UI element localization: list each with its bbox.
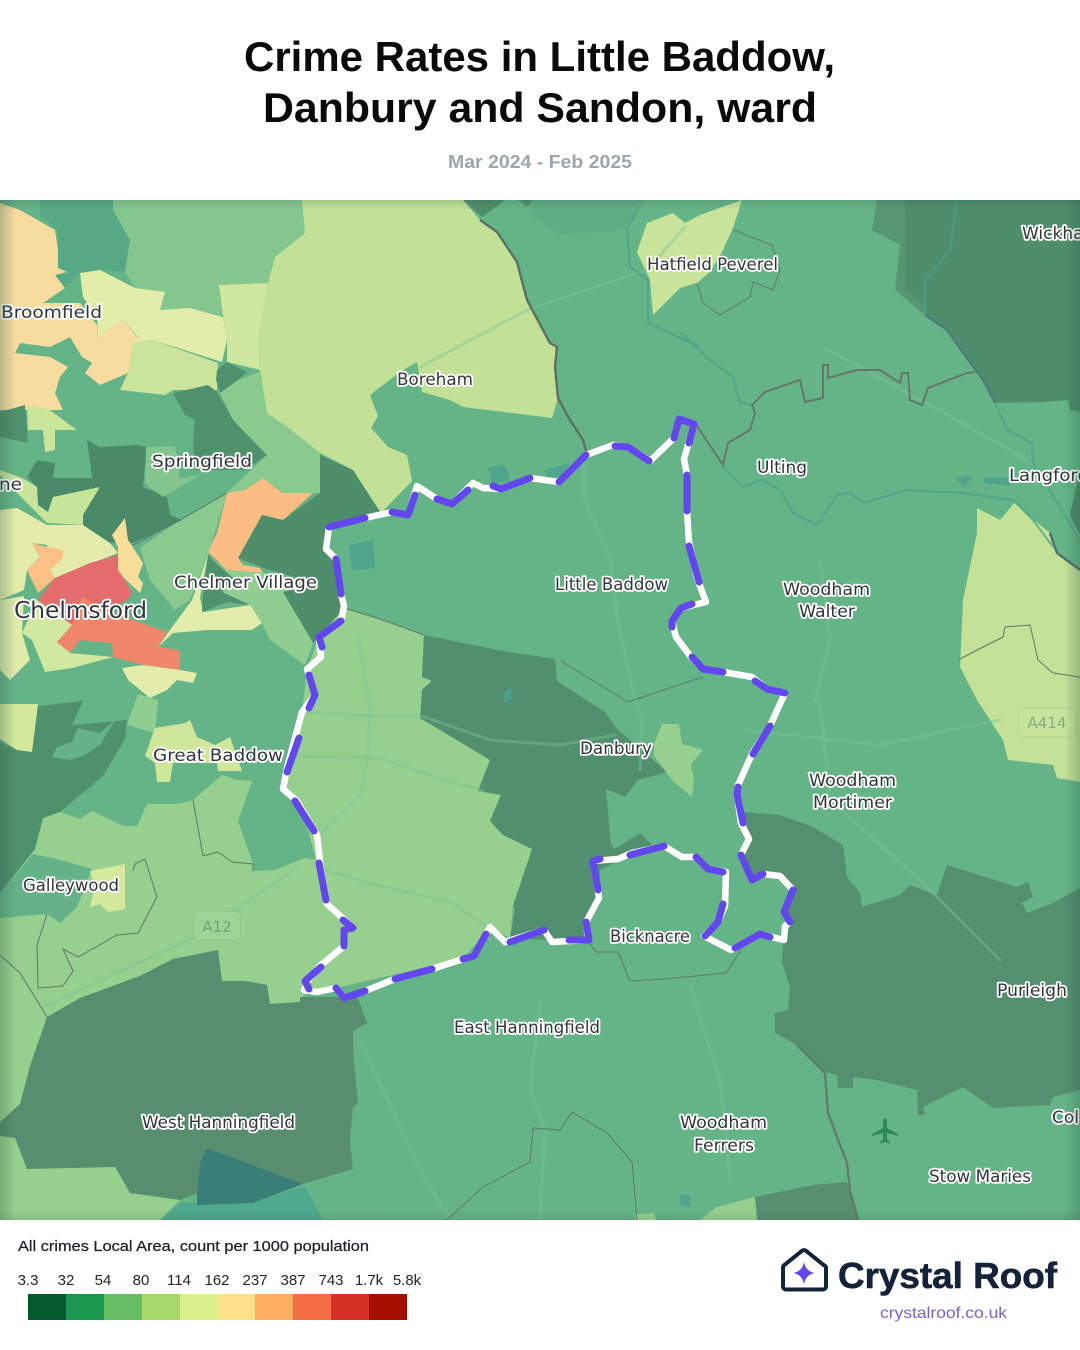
road badge: A12: A12	[202, 918, 232, 936]
place name labels: Woodham	[783, 580, 870, 600]
legend scale values: 54	[95, 1272, 111, 1289]
choropleth: light green central and western area	[0, 608, 532, 1220]
legend title: All crimes Local Area, count per 1000 population	[18, 1238, 369, 1255]
choropleth: south-east dark area	[742, 812, 1080, 1115]
rivers and water	[349, 200, 1080, 1207]
place name labels: Stow Maries	[929, 1167, 1031, 1187]
choropleth: Chelmsford north areas	[0, 203, 320, 610]
legend scale values: 114	[167, 1272, 191, 1289]
subtitle: date range: Mar 2024 - Feb 2025	[448, 152, 632, 172]
boundary lines	[0, 220, 1080, 1220]
legend scale values: 5.8k	[393, 1272, 422, 1289]
title: Crime Rates in Little Baddow,	[244, 33, 835, 80]
place name labels: Mortimer	[813, 793, 892, 813]
place name labels: Danbury	[580, 739, 652, 759]
place name labels: Bicknacre	[610, 927, 690, 947]
place name labels: Great Baddow	[153, 746, 283, 766]
road badge: A12	[194, 912, 240, 940]
place name labels: Woodham	[809, 771, 896, 791]
roads	[43, 227, 1027, 1220]
title	[244, 33, 835, 131]
legend scale values: 32	[58, 1272, 74, 1289]
choropleth: south-west dark and teal areas	[0, 701, 367, 1220]
place name labels: Little Baddow	[555, 575, 668, 595]
place name labels: West Hanningfield	[142, 1113, 295, 1133]
choropleth: north and east areas	[40, 200, 1080, 782]
legend scale values: 80	[133, 1272, 149, 1289]
choropleth: Danbury light patch	[654, 724, 703, 797]
place name labels: Purleigh	[997, 981, 1067, 1001]
place name labels: Walter	[799, 602, 855, 622]
choropleth: Danbury dark area	[420, 635, 667, 940]
website url: crystalroof.co.uk	[880, 1305, 1008, 1322]
legend scale values: 743	[318, 1272, 344, 1289]
legend scale values: 162	[204, 1272, 230, 1289]
place name labels: Broomfield	[1, 303, 102, 323]
choropleth: Chelmer Village areas	[158, 455, 380, 665]
logo wordmark: Crystal Roof	[838, 1255, 1058, 1296]
legend scale values: 1.7k	[355, 1272, 384, 1289]
map edge vignette	[0, 200, 1080, 1220]
road badge: A414	[1018, 708, 1076, 736]
map base: mid green areas	[0, 200, 1080, 1220]
place name labels: Col	[1052, 1108, 1079, 1128]
place name labels: Ferrers	[694, 1136, 754, 1156]
choropleth: Chelmsford centre, red and orange areas	[0, 508, 197, 698]
road badge: A414: A414	[1028, 714, 1066, 732]
place name labels: Galleywood	[23, 876, 119, 896]
legend scale values	[18, 1272, 422, 1289]
legend scale values: 237	[242, 1272, 268, 1289]
place name labels: Hatfield Peverel	[647, 255, 778, 275]
place name labels: Chelmer Village	[174, 573, 317, 593]
legend scale values: 3.3	[18, 1272, 38, 1289]
place name labels: Boreham	[397, 370, 473, 390]
map panel	[0, 200, 1080, 1220]
header	[244, 33, 835, 172]
place name labels: Ulting	[757, 458, 807, 478]
place name labels: Chelmsford	[14, 598, 147, 624]
place name labels: Woodham	[680, 1113, 767, 1133]
title: Danbury and Sandon, ward	[263, 84, 817, 131]
place name labels	[0, 224, 1080, 1187]
place name labels: Springfield	[152, 452, 252, 472]
legend colour bar	[28, 1294, 407, 1320]
legend scale values: 387	[280, 1272, 306, 1289]
place name labels: East Hanningfield	[454, 1018, 600, 1038]
ward boundary: white line with purple dashes	[283, 419, 793, 998]
footer	[18, 1238, 1058, 1322]
icon: airfield plane	[872, 1118, 898, 1144]
logo icon: house with star	[783, 1250, 826, 1290]
choropleth: southern edge patches	[635, 1182, 858, 1220]
